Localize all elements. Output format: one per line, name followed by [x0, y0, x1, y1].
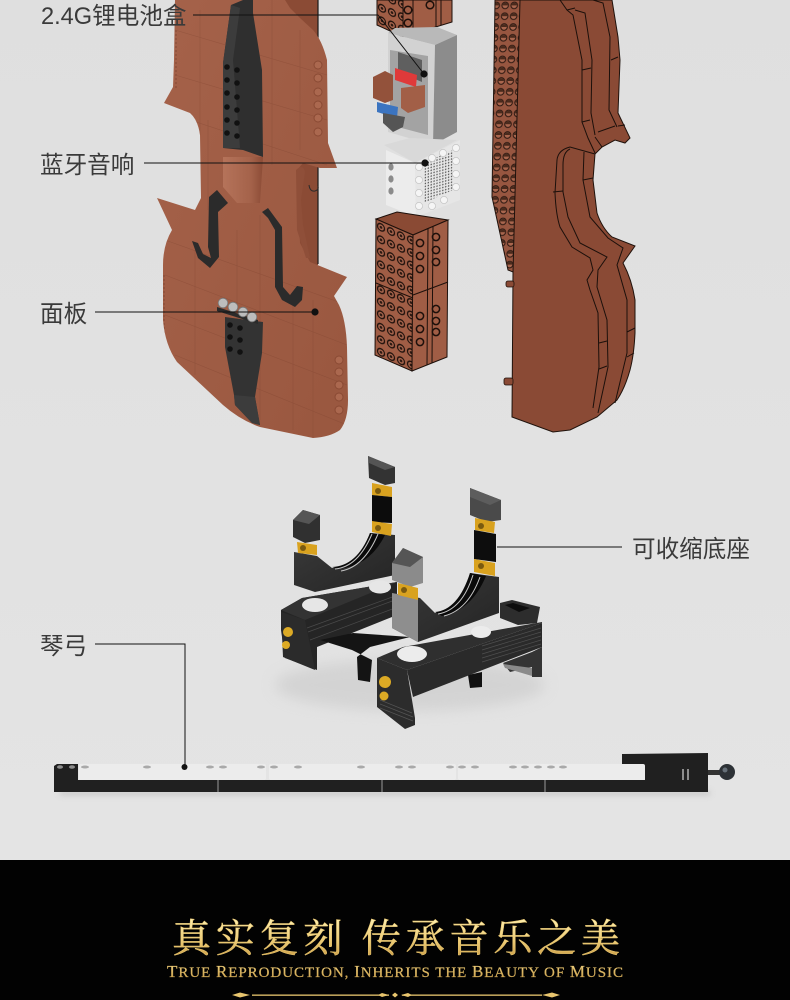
dark connector	[383, 113, 405, 132]
stand shadow	[275, 659, 545, 711]
plate panel seams	[164, 0, 347, 438]
f-hole right	[262, 208, 303, 307]
footer ornament	[232, 992, 560, 998]
label: extendable base: 可收缩底座	[632, 536, 750, 563]
blue switch	[377, 102, 398, 118]
gold knob back	[282, 627, 293, 649]
front stand right post	[470, 488, 501, 522]
top brick section	[377, 0, 452, 37]
lower battery brick	[375, 212, 448, 371]
front bench top	[377, 622, 542, 670]
bow tip knob	[708, 764, 735, 780]
pegs	[504, 281, 514, 385]
back strip behind the plate	[270, 0, 318, 265]
back stand	[281, 456, 397, 670]
extendable stand	[275, 456, 545, 729]
front stand right leg	[503, 647, 542, 677]
bridge pegs	[217, 298, 258, 324]
back stand left post	[293, 510, 320, 543]
back stand right post	[368, 456, 395, 485]
label: panel	[40, 301, 319, 328]
violin body plate	[157, 0, 348, 438]
lower tailpiece	[225, 317, 263, 425]
label: 2.4G battery box	[41, 3, 428, 78]
bow white segments	[79, 764, 645, 780]
front stand middle leg	[468, 672, 482, 688]
back body	[512, 0, 635, 432]
violin bow	[54, 753, 735, 795]
back cradle	[294, 533, 395, 592]
battery box	[373, 27, 457, 145]
front bench end	[377, 658, 415, 729]
label: 2.4G battery box: 2.4G锂电池盒	[41, 3, 187, 30]
footer subtitle: TRUE REPRODUCTION, INHERITS THE BEAUTY OF MUSIC	[167, 962, 623, 981]
side ridge	[296, 167, 310, 258]
front stand left post	[392, 548, 423, 587]
red switch	[395, 68, 417, 87]
violin back plate side view	[492, 0, 635, 432]
stud strip	[492, 0, 522, 274]
front stand cradle	[392, 573, 499, 642]
label: bluetooth speaker	[40, 152, 429, 179]
brown block left	[373, 71, 393, 103]
back bench right leg and top	[281, 582, 397, 670]
rim studs	[314, 61, 343, 414]
chin rest	[223, 157, 263, 203]
bow shadow	[60, 791, 710, 795]
label: bow	[40, 634, 188, 770]
speaker block	[384, 138, 460, 217]
violin front plate assembly	[157, 0, 348, 438]
battery holder interior	[390, 50, 428, 135]
bow black bar	[54, 753, 708, 792]
battery and speaker exploded stack	[373, 0, 460, 371]
label: bow: 琴弓	[40, 634, 87, 660]
f-hole left	[192, 190, 228, 268]
footer banner	[0, 860, 790, 1000]
brown block right	[401, 85, 425, 113]
front stand	[377, 488, 542, 729]
footer title: 真实复刻 传承音乐之美	[172, 918, 620, 961]
gold knob front	[379, 676, 391, 700]
label: panel: 面板	[40, 301, 87, 328]
upper tailpiece	[223, 0, 263, 157]
connecting arms	[320, 633, 410, 682]
front bench long face	[407, 623, 542, 697]
back body contour lines	[553, 0, 635, 413]
square holder	[500, 600, 540, 625]
label: bluetooth speaker: 蓝牙音响	[40, 152, 134, 179]
